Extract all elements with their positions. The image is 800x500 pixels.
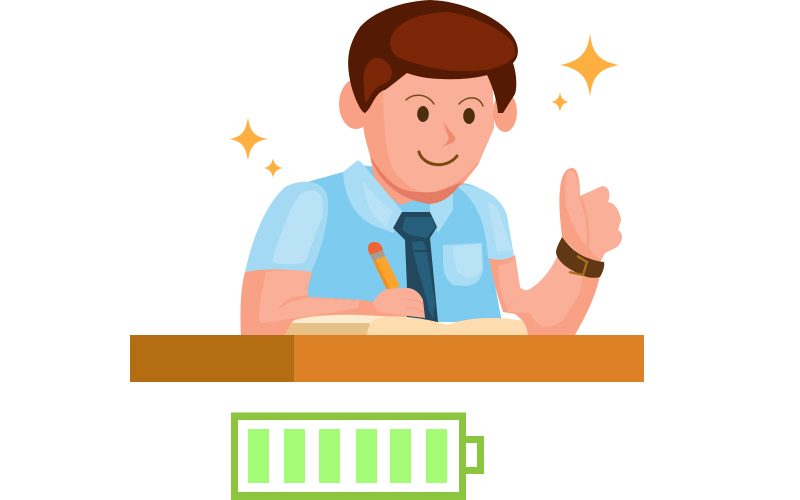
battery charge bars [248,429,447,483]
icon: small sparkle left [264,158,283,178]
pocket [443,243,483,286]
nose [442,122,455,147]
student figure [240,0,622,336]
pencil [368,242,400,292]
right arm and thumbs-up hand [489,168,622,335]
left sleeve [245,182,328,274]
battery outline [231,412,466,500]
eyebrows [406,95,483,106]
shirt collar [343,160,453,233]
smile [419,152,457,165]
shirt body [300,165,502,322]
ear left [339,79,373,129]
battery terminal [466,436,484,474]
icon: large sparkle right [560,33,619,97]
eyes [417,106,475,124]
desk [130,335,644,382]
neck [363,60,494,205]
writing hand [373,288,425,318]
hair [348,0,518,113]
left arm [240,269,428,336]
icon: small sparkle right [551,92,569,112]
open book [285,315,528,335]
wristwatch [556,237,604,278]
face [383,60,493,192]
icon: large sparkle left [229,117,268,161]
right sleeve [453,184,514,260]
full battery icon [231,412,484,500]
tie [393,212,438,322]
chin shadow [370,155,462,204]
ear right [493,92,517,132]
